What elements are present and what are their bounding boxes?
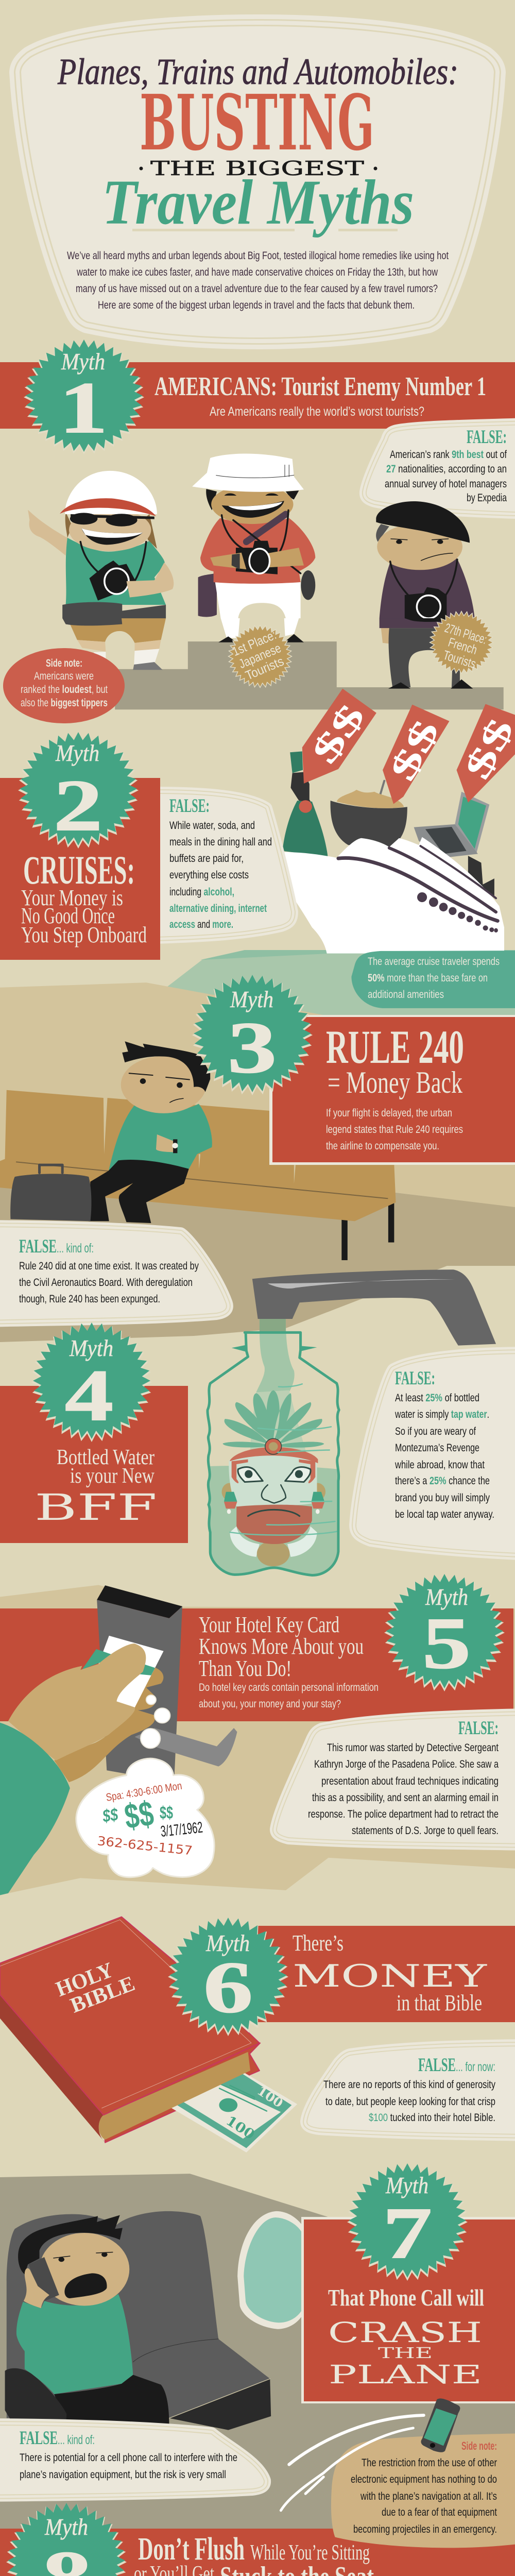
water stream (256, 1319, 295, 1392)
myth 7 badge: 7 (383, 2192, 432, 2274)
myth 1 badge: Myth (61, 348, 105, 375)
myth 7 heading (328, 2284, 484, 2389)
side note panel: electronics: Side note: (461, 2439, 497, 2452)
false text: Montezuma’s Revenge (395, 1442, 479, 1454)
tag dollars 2: $$ (382, 713, 448, 788)
false text: the Civil Aeronautics Board. With deregulation (19, 1277, 193, 1289)
myth 3 badge: 3 (228, 1007, 277, 1088)
false text: American’s rank 9th best out of (390, 449, 507, 461)
faucet and bottle (208, 1269, 496, 1575)
cruise spending callout (351, 951, 515, 1008)
side note panel: electronics (331, 2434, 515, 2548)
false text: buffets are paid for, (169, 853, 244, 865)
false text: Rule 240 did at one time exist. It was created by (19, 1260, 199, 1272)
myth 2 false panel (154, 794, 291, 937)
false text (385, 449, 507, 504)
myth 6 badge: Myth (205, 1930, 250, 1956)
plastic bottle outline (208, 1332, 339, 1575)
myth 4 heading: BFF (35, 1486, 157, 1529)
myth 8 badge (6, 2503, 127, 2576)
myth 1 question: Are Americans really the world’s worst tourists? (210, 404, 424, 419)
false text (323, 2079, 495, 2124)
myth 6 heading: There’s (293, 1930, 344, 1956)
cloud text: $$ (160, 1803, 173, 1823)
false text: There is potential for a cell phone call to interfere with the (20, 2452, 237, 2464)
airport bench scene (0, 1041, 396, 1260)
myth 3 text (326, 1107, 463, 1152)
badge: 1st place japanese (228, 624, 293, 688)
myth 5 heading: Than You Do! (199, 1656, 291, 1681)
false text: alternative dining, internet (169, 903, 267, 914)
myth 8 heading: While You’re Sitting (250, 2541, 370, 2565)
tourist: japanese (192, 454, 315, 642)
myth 3 heading (326, 1021, 464, 1099)
myth 1 false panel (367, 425, 515, 512)
delayed traveler (89, 1041, 212, 1223)
myth 4 badge: Myth (69, 1335, 113, 1361)
myth 6 heading (293, 1930, 488, 2015)
tag dollars 3: $$ (456, 711, 515, 786)
myth 7 badge (347, 2163, 468, 2281)
badge: 27th place french: Tourists (441, 648, 478, 671)
side note: americans loudest: also the biggest tippers (21, 697, 108, 709)
tourist: american (28, 471, 174, 670)
myth 3 red block (269, 1015, 515, 1165)
food bowl (331, 781, 407, 849)
badge: 1st place japanese: Japanese (237, 641, 283, 671)
cloud text: 362-625-1157 (96, 1834, 193, 1858)
myth 3 text: legend states that Rule 240 requires (326, 1124, 463, 1136)
false label: ... kind of: (58, 2433, 95, 2447)
airplane seat (7, 2211, 271, 2430)
myth 2 heading (21, 848, 147, 947)
intro text: Here are some of the biggest urban legends in travel and the facts that debunk them. (98, 299, 415, 311)
myth 2 red block (0, 778, 160, 960)
suitcase (10, 1165, 91, 1221)
false label: FALSE: (169, 795, 210, 817)
bill denominations: 100 (223, 2113, 258, 2143)
holy bible (0, 1917, 297, 2153)
passenger on phone (5, 2215, 169, 2424)
myth 2 badge: 2 (54, 765, 102, 846)
myth 6 badge (168, 1918, 288, 2036)
title: Travel Myths: Travel Myths (102, 167, 414, 238)
false text: access and more. (169, 919, 233, 930)
myth 4 heading: Bottled Water (57, 1446, 154, 1469)
myth 6 badge: 6 (203, 1946, 253, 2028)
false text (308, 1742, 499, 1837)
false text (394, 1392, 494, 1520)
false label: FALSE (20, 2428, 58, 2449)
myth 1 banner (0, 362, 515, 429)
myth 2 heading: You Step Onboard (21, 922, 147, 947)
false label: FALSE: (395, 1368, 435, 1389)
false text: water is simply tap water. (394, 1409, 489, 1420)
myth 5 heading: about you, your money and your stay? (199, 1698, 341, 1710)
myth 5 heading: Your Hotel Key Card (199, 1612, 339, 1637)
side note: americans loudest: Side note: (46, 657, 82, 669)
myth 3 text: If your flight is delayed, the urban (326, 1107, 452, 1119)
title: THE BIGGEST (139, 157, 377, 180)
myth 6 heading: in that Bible (397, 1990, 482, 2015)
header panel (21, 26, 494, 337)
myth 3 badge (192, 975, 313, 1095)
myth 2 badge: Myth (55, 740, 99, 766)
badge: 27th place french (429, 611, 494, 674)
badge: 1st place japanese: Tourists (244, 654, 286, 683)
false text: While water, soda, and (169, 820, 255, 832)
myth 2 badge (18, 732, 139, 849)
airplane window (237, 2211, 302, 2329)
bible title (53, 1958, 138, 2018)
title: THE BIGGEST: THE BIGGEST (150, 157, 364, 180)
bible title: HOLY (53, 1958, 116, 2002)
myth 6 banner (258, 1926, 515, 2022)
key card scene (0, 1585, 237, 1895)
price tag 3 (457, 704, 515, 803)
myth 7 red block (301, 2217, 515, 2403)
myth 8 heading (134, 2532, 374, 2576)
false text (169, 820, 272, 930)
badge: 27th place french: French (447, 635, 479, 657)
myth 3 false panel (0, 1227, 226, 1320)
water in bottle (209, 1465, 338, 1575)
myth 5 heading: Do hotel key cards contain personal information (199, 1682, 379, 1693)
side note: americans loudest: Americans were (34, 670, 94, 682)
cloud text: $$ (122, 1794, 156, 1837)
plane seat scene (5, 2211, 302, 2430)
bible title: BIBLE (67, 1972, 138, 2018)
myth 6 false panel (307, 2046, 515, 2134)
false text: At least 25% of bottled (395, 1392, 479, 1404)
false text: meals in the dining hall and (169, 836, 272, 848)
myth 7 false panel (0, 2426, 264, 2495)
myth 6 heading: MONEY (293, 1958, 488, 1994)
hand holding key card (0, 1636, 170, 1895)
bill denominations: 100 (254, 2083, 286, 2111)
data cloud (76, 1758, 214, 1877)
champagne bottle (283, 751, 328, 857)
bill denominations (223, 2083, 286, 2143)
myth 7 badge: Myth (385, 2172, 428, 2198)
badge: 27th place french: 27th Place: (443, 621, 489, 647)
cruise spending callout: additional amenities (368, 989, 444, 1001)
cloud text: Spa: 4:30-6:00 Mon (105, 1780, 183, 1804)
myth 2 heading: No Good Once (21, 903, 115, 928)
false label: FALSE (418, 2055, 456, 2076)
false text: there’s a 25% chance the (395, 1475, 490, 1487)
hundred dollar bill (163, 2066, 297, 2153)
tiki mask (222, 1391, 325, 1566)
side note: americans loudest: ranked the loudest, but (21, 684, 108, 696)
myth 5 badge: Myth (425, 1584, 468, 1610)
myth 7 heading: THE (378, 2344, 433, 2362)
side note: americans loudest (3, 648, 125, 723)
false text: brand you buy will simply (395, 1492, 490, 1504)
cloud text (96, 1780, 203, 1858)
myth 4 heading (35, 1446, 157, 1529)
false text: So if you are weary of (395, 1426, 476, 1437)
myth 2 heading: CRUISES: (23, 848, 135, 892)
myth 8 badge: Myth (44, 2514, 88, 2540)
myth 1 badge (24, 340, 144, 454)
false label: ... kind of: (57, 1241, 94, 1256)
false text (20, 2452, 237, 2481)
myth 8 heading: Don’t Flush (138, 2532, 245, 2567)
false text: including alcohol, (169, 886, 234, 898)
myth 4 false panel (356, 1354, 515, 1553)
myth 4 badge (31, 1323, 152, 1442)
background scenery shapes (0, 950, 515, 2576)
myth 4 red block (0, 1386, 188, 1543)
cruise ship (256, 837, 504, 954)
tag dollars 1: $$ (303, 696, 373, 771)
false text: everything else costs (169, 869, 249, 881)
myth 5 badge: 5 (422, 1602, 471, 1684)
cloud text: 3/17/1962 (160, 1819, 203, 1840)
myth 5 banner (0, 1608, 513, 1721)
smartphone with signal arcs (281, 2398, 460, 2511)
tourist: french (376, 501, 475, 689)
false text: while abroad, know that (394, 1459, 485, 1471)
myth 5 false panel (277, 1716, 515, 1843)
intro text (67, 250, 449, 311)
bench (0, 1090, 396, 1260)
myth 7 heading: PLANE (329, 2360, 482, 2389)
cloud text: $$ (101, 1805, 120, 1826)
myth 8 banner (0, 2529, 515, 2576)
false text: plane’s navigation equipment, but the risk is very small (20, 2469, 226, 2481)
false label: ... for now: (456, 2060, 495, 2074)
myth 2 heading: Your Money is (21, 885, 123, 910)
price tag 2 (383, 705, 450, 804)
price tag 1 (302, 689, 376, 784)
false text: though, Rule 240 has been expunged. (19, 1293, 160, 1305)
cruise spending callout: 50% more than the base fare on (368, 972, 488, 984)
myth 7 heading: CRASH (328, 2316, 482, 2349)
cruise items (256, 689, 515, 954)
myth 1 badge: 1 (59, 367, 108, 448)
myth 3 heading: = Money Back (328, 1065, 462, 1099)
false text (19, 1260, 199, 1305)
false label: FALSE (19, 1236, 57, 1257)
myth 4 heading: is your New (70, 1464, 155, 1488)
badge: 1st place japanese: 1st Place: (230, 628, 279, 659)
laptop (414, 792, 489, 858)
myth 5 heading: Knows More About you (199, 1634, 364, 1659)
myth 3 text: the airline to compensate you. (326, 1140, 439, 1152)
door lock (97, 1585, 237, 1782)
podium (115, 641, 504, 709)
myth 3 badge: Myth (230, 986, 273, 1012)
myth 5 badge (384, 1574, 505, 1691)
myth 5 heading (199, 1612, 379, 1710)
faucet (252, 1269, 496, 1346)
myth 4 badge: 4 (65, 1354, 113, 1436)
